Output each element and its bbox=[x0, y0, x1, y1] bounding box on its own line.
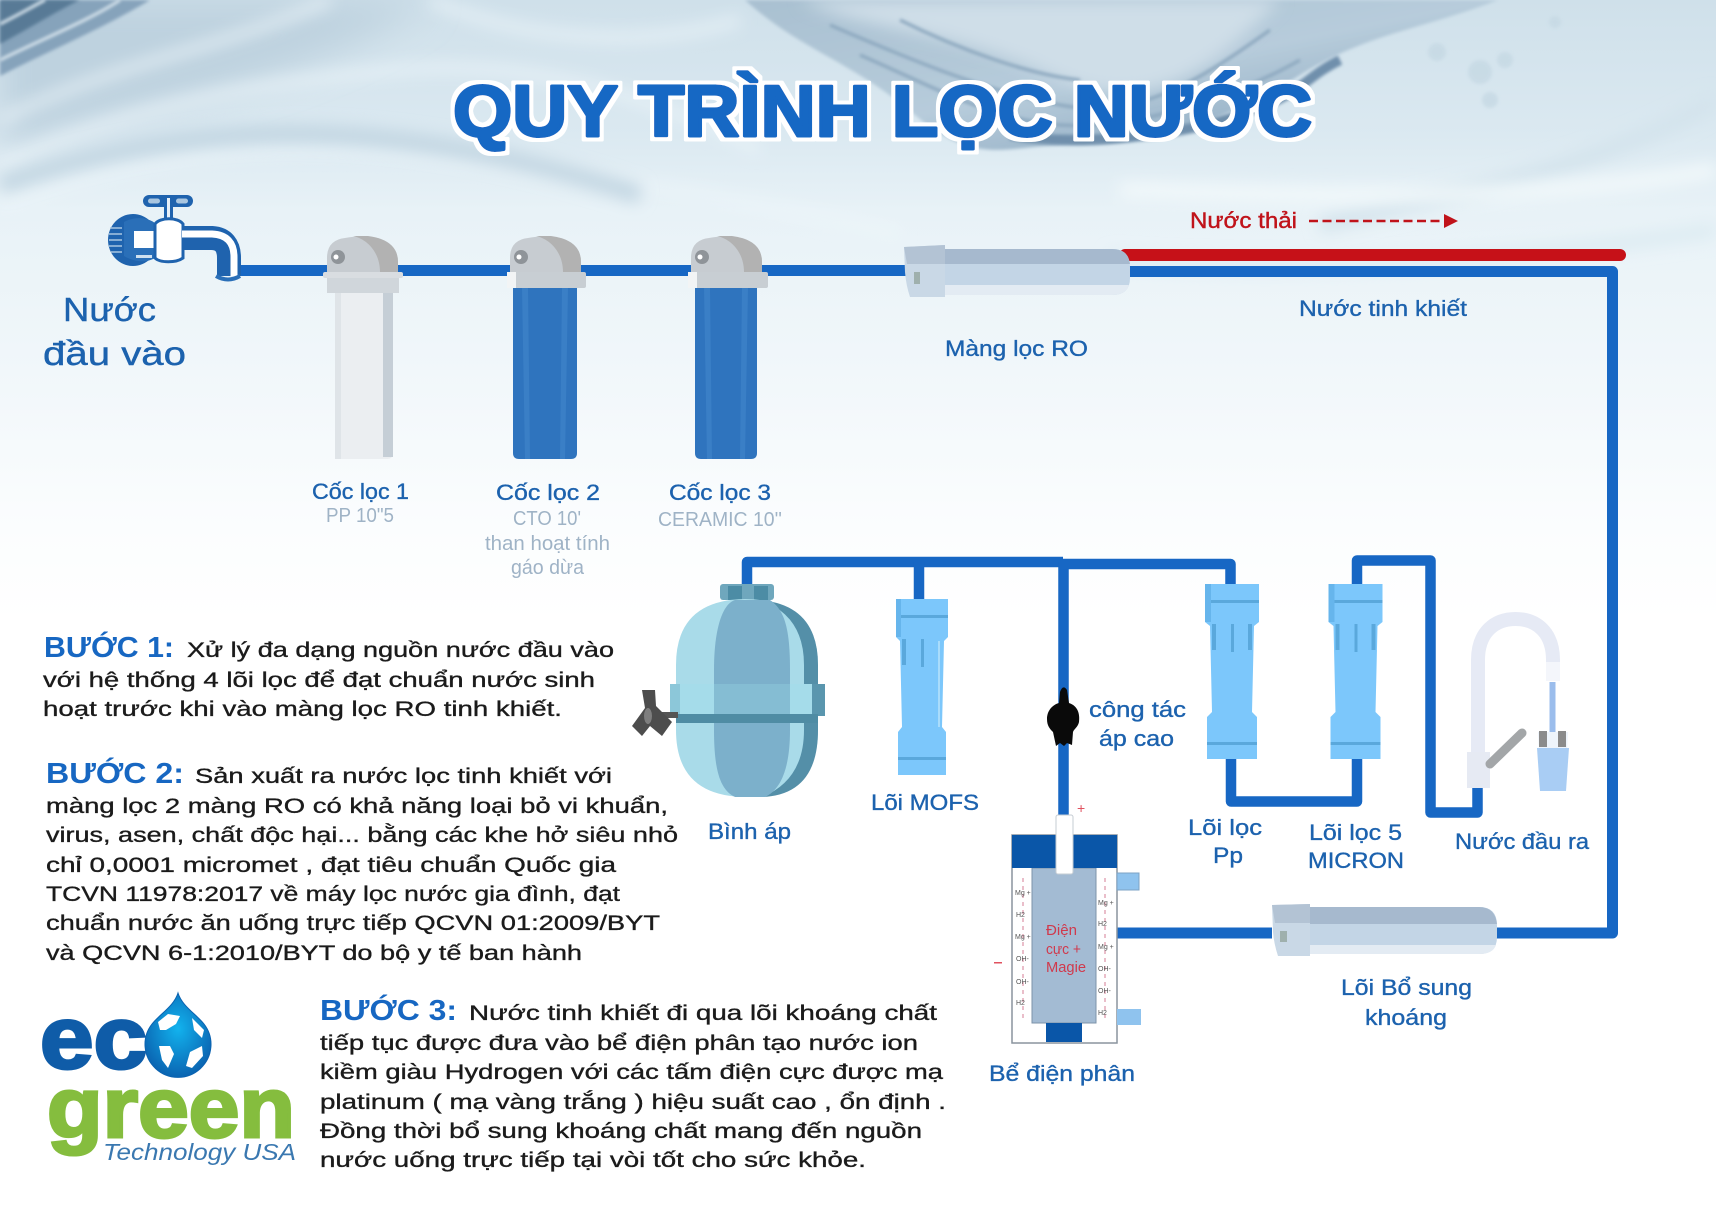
text block: step 3: Nước tinh khiết đi qua lõi khoáng chất bbox=[469, 1002, 937, 1025]
text block: step 3: kiềm giàu Hydrogen với các tấm điện cực được mạ bbox=[320, 1061, 943, 1084]
label: mineral cartridge: khoáng bbox=[1365, 1005, 1447, 1030]
label: cup 2: Cốc lọc 2 bbox=[496, 480, 600, 505]
text block: step 2: màng lọc 2 màng RO có khả năng loại bỏ vi khuẩn, bbox=[46, 795, 668, 818]
ion labels: OH- bbox=[1098, 988, 1112, 995]
label: cup 2: gáo dừa bbox=[511, 557, 585, 579]
electrode label bbox=[1046, 922, 1086, 976]
pressure switch bbox=[1047, 687, 1079, 746]
text block: step 1: hoạt trước khi vào màng lọc RO tinh khiết. bbox=[43, 698, 562, 721]
ion labels: Mg + bbox=[1015, 890, 1031, 897]
pipe: waste water bbox=[1125, 249, 1620, 261]
label: inlet water: đầu vào bbox=[43, 335, 186, 372]
outlet faucet with glass bbox=[1467, 619, 1569, 791]
text block: step 2 bbox=[46, 756, 678, 965]
label: 5 micron cartridge: MICRON bbox=[1308, 848, 1404, 873]
title: QUY TRÌNH LỌC NƯỚC bbox=[453, 71, 1312, 152]
label: waste water: Nước thải bbox=[1190, 208, 1297, 233]
ion labels: Mg + bbox=[1098, 900, 1114, 907]
logo wordmark: eco: ec bbox=[40, 988, 147, 1087]
label: MOFS: Lõi MOFS bbox=[871, 790, 979, 815]
electrolysis tank bbox=[994, 800, 1141, 1043]
label: pressure switch: áp cao bbox=[1099, 726, 1174, 751]
text block: step 1: BƯỚC 1: bbox=[44, 630, 174, 664]
label: pressure tank: Bình áp bbox=[708, 819, 791, 844]
text block: step 3: Đồng thời bổ sung khoáng chất mang đến nguồn bbox=[320, 1120, 922, 1143]
label: 5 micron cartridge: Lõi lọc 5 bbox=[1309, 820, 1402, 845]
pressure tank bbox=[632, 584, 825, 797]
polarity marks: + bbox=[1077, 800, 1085, 816]
electrode label: Điện bbox=[1046, 922, 1077, 939]
label: cup 2: CTO 10' bbox=[513, 508, 581, 530]
icon: globe water drop bbox=[145, 993, 211, 1077]
logo wordmark: green: green bbox=[47, 1061, 295, 1156]
label: cup 1 bbox=[312, 479, 409, 527]
ion labels: Mg + bbox=[1015, 934, 1031, 941]
text block: step 2: Sản xuất ra nước lọc tinh khiết với bbox=[195, 765, 612, 788]
label: pressure switch: công tác bbox=[1089, 697, 1186, 722]
label: inlet water: Nước bbox=[63, 291, 156, 328]
text block: step 2: chỉ 0,0001 micromet , đạt tiêu chuẩn Quốc gia bbox=[46, 854, 616, 877]
ion labels: H2 bbox=[1098, 921, 1107, 928]
label: outlet water: Nước đầu ra bbox=[1455, 829, 1590, 854]
RO membrane bbox=[904, 245, 1130, 297]
electrode label: Magie bbox=[1046, 959, 1086, 976]
pipes: lower circuit bbox=[747, 560, 1478, 816]
filter cup 1 bbox=[323, 236, 403, 459]
text block: step 1: với hệ thống 4 lõi lọc để đạt chuẩn nước sinh bbox=[43, 669, 595, 692]
ion labels: H2 bbox=[1016, 1000, 1025, 1007]
electrode label: cực + bbox=[1046, 941, 1081, 958]
label: cup 3 bbox=[658, 480, 782, 531]
text block: step 1 bbox=[43, 630, 614, 721]
label: inlet water bbox=[43, 291, 186, 372]
text block: step 3: BƯỚC 3: bbox=[320, 993, 457, 1027]
ion labels: Mg + bbox=[1098, 944, 1114, 951]
text block: step 2: BƯỚC 2: bbox=[46, 756, 184, 790]
label: RO membrane: Màng lọc RO bbox=[945, 336, 1088, 361]
ion labels: H2 bbox=[1016, 912, 1025, 919]
logo tagline: Technology USA bbox=[103, 1139, 296, 1165]
pipe: pure water loop to mineral cartridge bbox=[1114, 272, 1612, 933]
label: cup 1: PP 10"5 bbox=[326, 505, 394, 527]
5 micron cartridge bbox=[1328, 584, 1382, 759]
PP cartridge bbox=[1205, 584, 1259, 759]
text block: step 2: TCVN 11978:2017 về máy lọc nước gia đình, đạt bbox=[46, 883, 620, 906]
ion labels bbox=[1015, 890, 1114, 1017]
ion labels: OH- bbox=[1016, 979, 1030, 986]
arrow: waste water bbox=[1309, 214, 1458, 228]
pipe: inlet to RO bbox=[236, 265, 906, 276]
text block: step 2: và QCVN 6-1:2010/BYT do bộ y tế ban hành bbox=[46, 942, 582, 965]
icon: inlet tap bbox=[108, 195, 240, 280]
mineral cartridge bbox=[1272, 904, 1497, 956]
label: mineral cartridge bbox=[1341, 975, 1472, 1030]
label: PP cartridge: Lõi lọc bbox=[1188, 815, 1262, 840]
label: pressure switch bbox=[1089, 697, 1186, 751]
filter cup 2 bbox=[507, 236, 586, 459]
text block: step 1: Xử lý đa dạng nguồn nước đầu vào bbox=[187, 639, 614, 662]
ion labels: H2 bbox=[1098, 1010, 1107, 1017]
label: mineral cartridge: Lõi Bổ sung bbox=[1341, 975, 1472, 1000]
label: cup 3: Cốc lọc 3 bbox=[669, 480, 771, 505]
label: PP cartridge: Pp bbox=[1213, 843, 1243, 868]
ion labels: OH- bbox=[1098, 966, 1112, 973]
label: electrolysis tank: Bể điện phân bbox=[989, 1061, 1135, 1086]
text block: step 3: nước uống trực tiếp tại vòi tốt cho sức khỏe. bbox=[320, 1149, 866, 1172]
text block: step 3 bbox=[320, 993, 946, 1172]
label: cup 3: CERAMIC 10'' bbox=[658, 509, 782, 531]
filter cup 3 bbox=[688, 236, 768, 459]
text block: step 3: platinum ( mạ vàng trắng ) hiệu suất cao , ổn định . bbox=[320, 1091, 946, 1114]
logo: Eco Green bbox=[40, 988, 296, 1165]
ion labels: OH- bbox=[1016, 956, 1030, 963]
MOFS cartridge bbox=[896, 599, 948, 775]
label: cup 2: than hoạt tính bbox=[485, 533, 610, 555]
label: pure water: Nước tinh khiết bbox=[1299, 296, 1467, 321]
label: cup 2 bbox=[485, 480, 610, 579]
label: 5 micron cartridge bbox=[1308, 820, 1404, 873]
text block: step 3: tiếp tục được đưa vào bể điện phân tạo nước ion bbox=[320, 1032, 918, 1055]
label: PP cartridge bbox=[1188, 815, 1262, 868]
label: cup 1: Cốc lọc 1 bbox=[312, 479, 409, 504]
text block: step 2: virus, asen, chất độc hại... bằng các khe hở siêu nhỏ bbox=[46, 824, 678, 847]
text block: step 2: chuẩn nước ăn uống trực tiếp QCVN 01:2009/BYT bbox=[46, 912, 660, 935]
